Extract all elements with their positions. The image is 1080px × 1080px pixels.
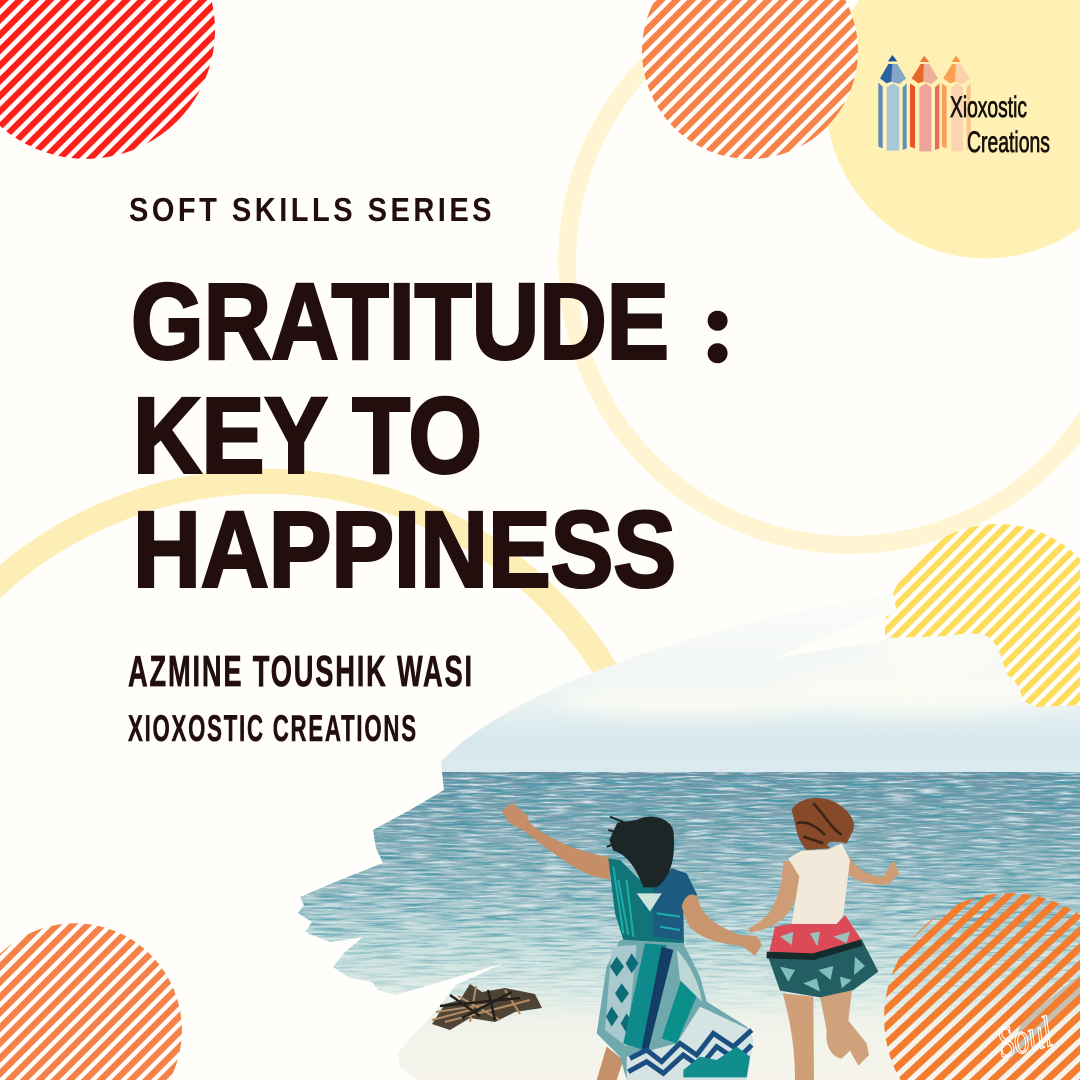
legs	[783, 993, 814, 1080]
driftwood	[432, 984, 542, 1030]
title: GRATITUDE	[131, 260, 669, 382]
logo: Xioxostic Creations	[878, 55, 1050, 159]
white top	[788, 843, 850, 924]
author name: AZMINE TOUSHIK WASI	[128, 646, 472, 696]
arms	[748, 861, 800, 933]
teal lower skirt	[767, 939, 878, 997]
circle: red striped top left	[0, 0, 215, 159]
ring: lower yellow arc	[0, 481, 640, 738]
circle: orange striped bottom left	[0, 923, 182, 1080]
title: KEY TO	[133, 374, 482, 496]
photo: two women running on the beach in a brush-shaped mask	[280, 590, 1080, 1080]
dress top	[608, 858, 697, 943]
rock under bottom right circle	[1008, 975, 1080, 1062]
circle: orange striped bottom right over photo	[884, 893, 1080, 1080]
small heading: SOFT SKILLS SERIES	[129, 191, 492, 228]
sea	[280, 772, 1080, 1080]
woman in teal dress	[502, 803, 762, 1080]
raised arm and hand	[502, 803, 610, 879]
woman in white top and red skirt	[748, 798, 899, 1080]
ring: large pale yellow outline	[567, 10, 1080, 545]
sky	[441, 593, 1080, 772]
title: :	[701, 270, 735, 383]
red skirt	[769, 915, 862, 955]
icon: three pencils	[878, 55, 971, 151]
arm holding hands	[682, 895, 762, 956]
auburn hair	[792, 798, 854, 850]
dark hair	[609, 817, 674, 887]
circle: orange striped top centre	[642, 0, 858, 159]
logo wordmark	[950, 91, 1050, 159]
red pencil	[910, 56, 939, 151]
orange pencil	[942, 56, 971, 151]
organisation name: XIOXOSTIC CREATIONS	[128, 708, 416, 749]
circle: pale yellow solid top right	[826, 0, 1080, 258]
signature: Soul	[993, 1007, 1057, 1068]
blue pencil	[878, 55, 907, 151]
logo wordmark: Xioxostic	[950, 91, 1027, 124]
title	[131, 260, 735, 610]
title: HAPPINESS	[133, 488, 676, 610]
skirt	[597, 940, 753, 1080]
circle: yellow striped right	[884, 524, 1080, 752]
back leg	[597, 1047, 623, 1080]
